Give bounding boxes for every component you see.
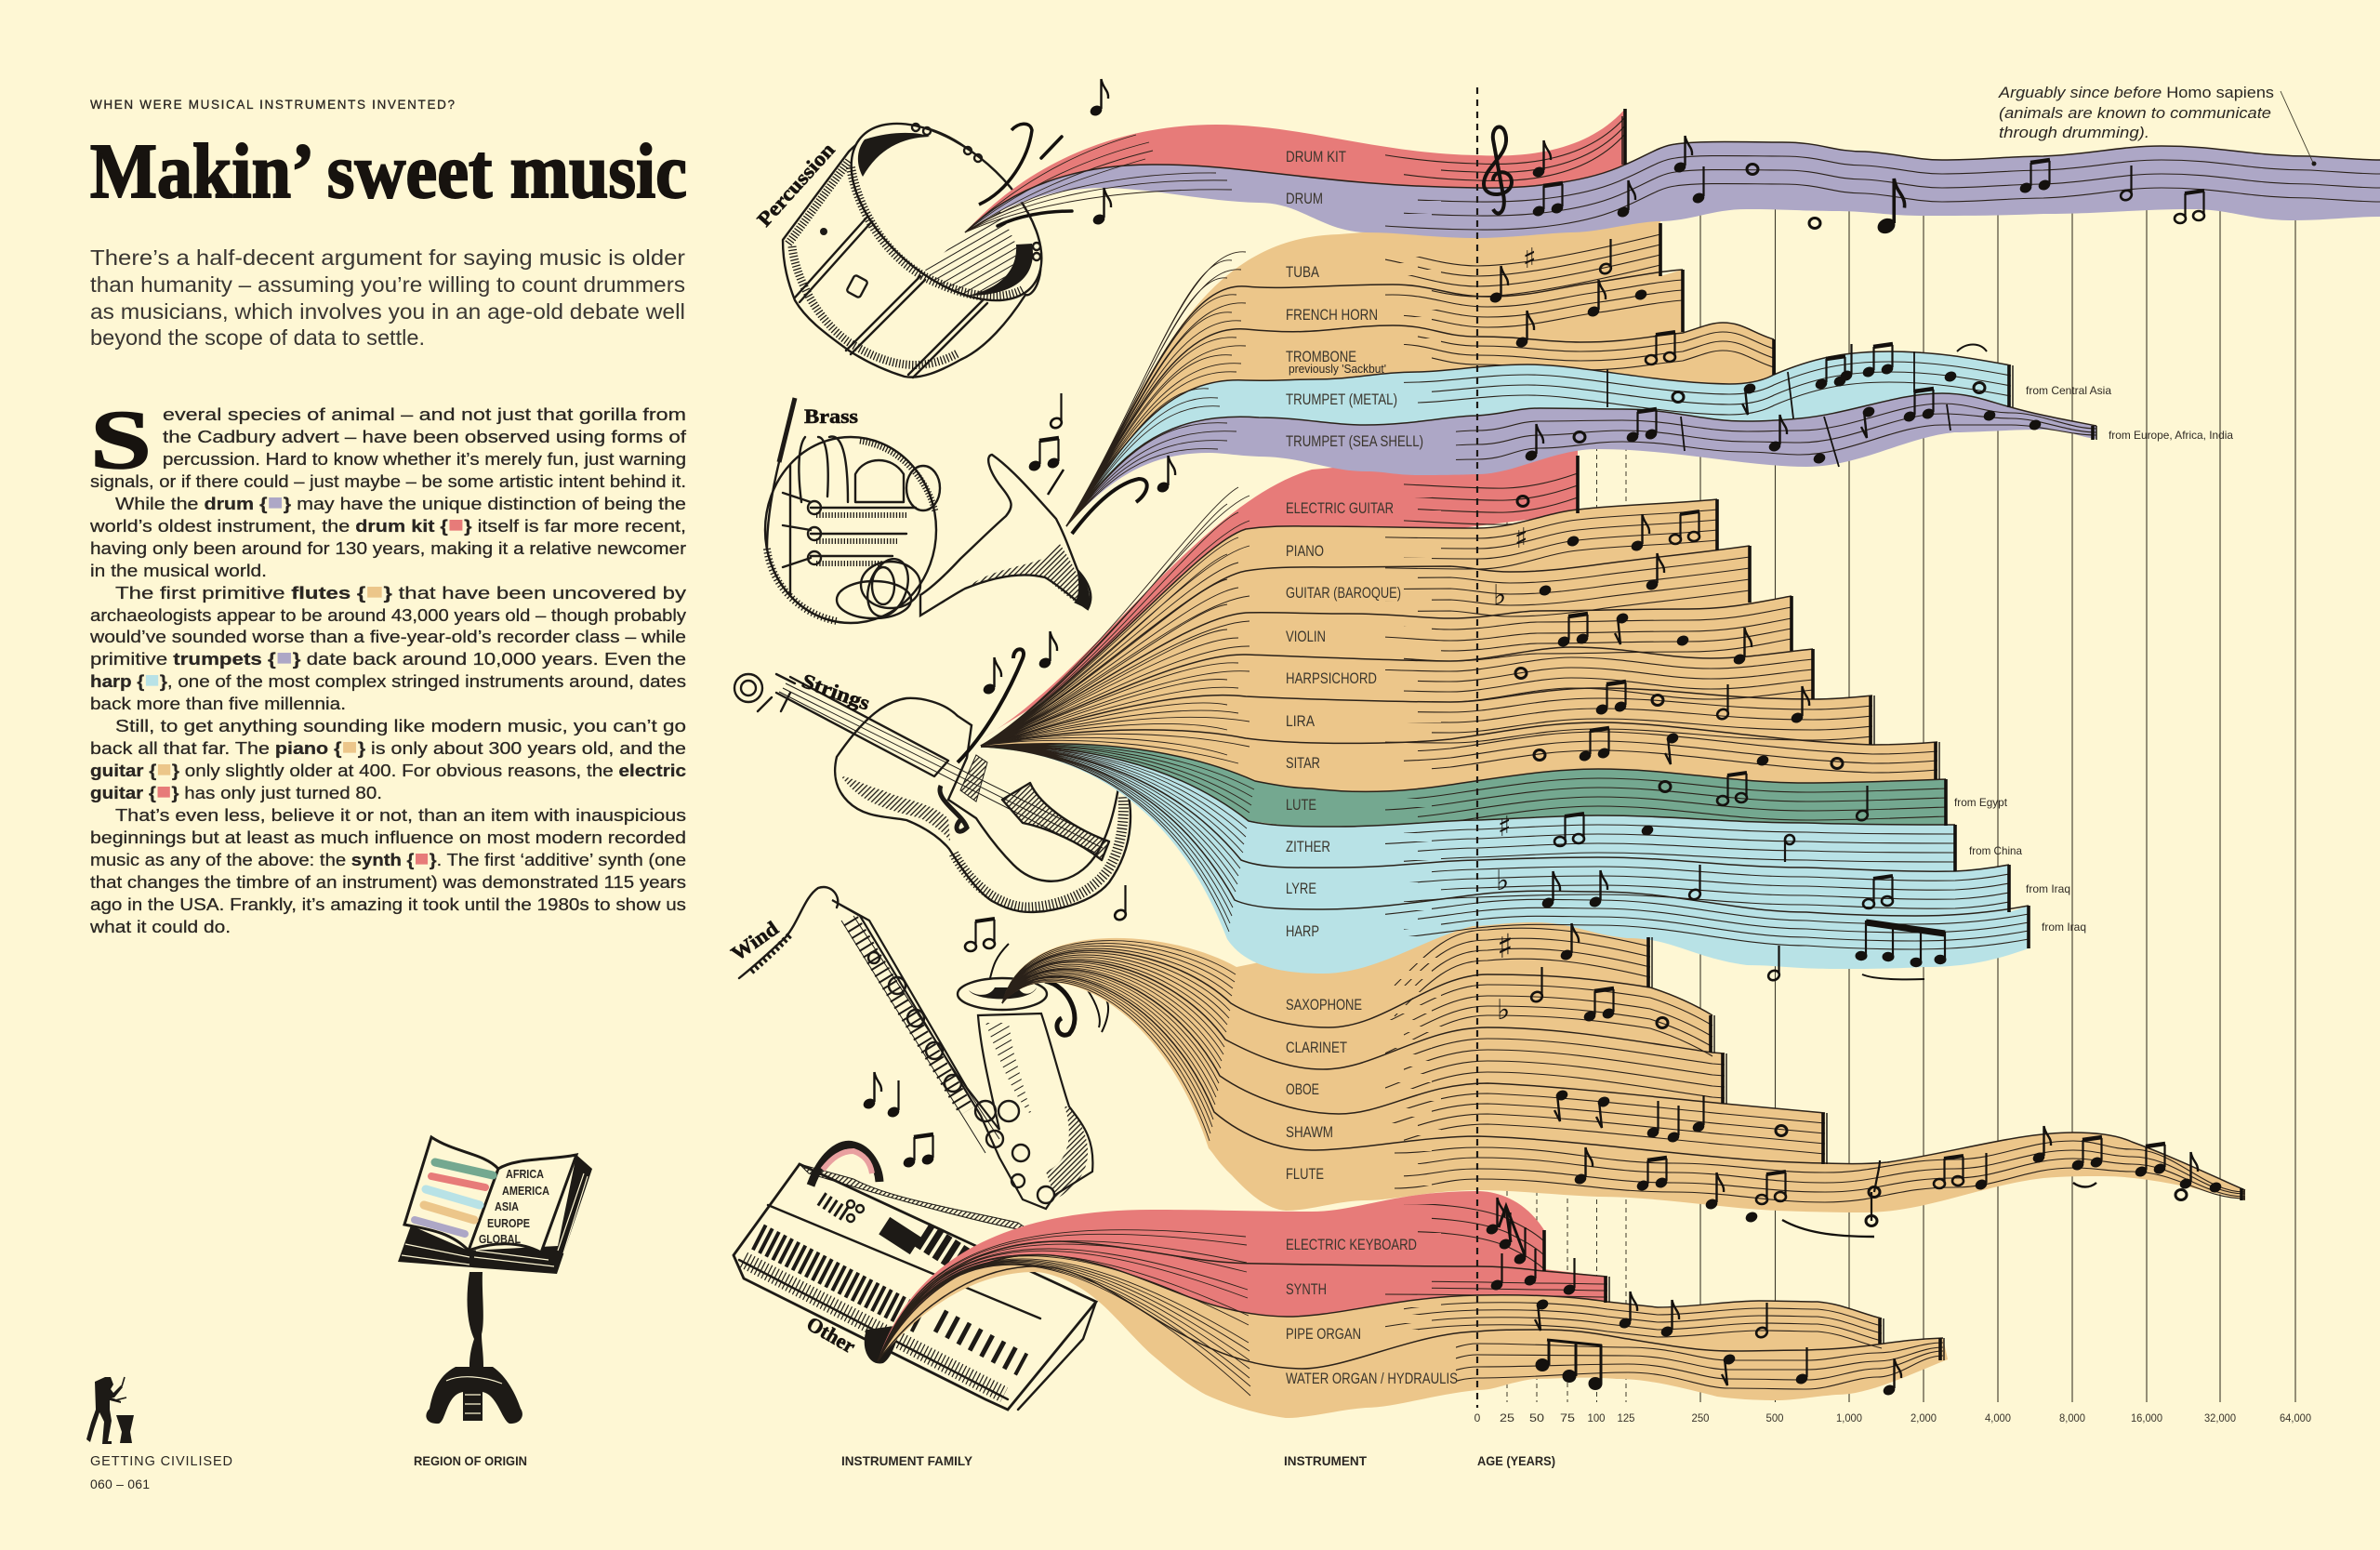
body text: having only been around for 130 years, making it a relative newcomer bbox=[90, 539, 686, 558]
family label: percussion: Percussion bbox=[752, 138, 840, 231]
music notes: brass bbox=[1027, 239, 2043, 494]
body text: ago in the USA. Frankly, it’s amazing it took until the 1980s to show us bbox=[90, 895, 686, 914]
label: violin: VIOLIN bbox=[1286, 629, 1326, 645]
illustration: electric keyboard bbox=[734, 1145, 1096, 1410]
section footer bbox=[90, 1454, 232, 1491]
origin notes: from Iraq bbox=[2042, 921, 2086, 934]
music notes: strings: ♭ bbox=[1493, 579, 1506, 612]
music notes: strings: ♯ bbox=[1498, 811, 1512, 843]
label: flute: FLUTE bbox=[1286, 1166, 1324, 1183]
stream: piano, baroque guitar, violin, harpsichord, lira, sitar bbox=[981, 499, 1937, 801]
body text bbox=[89, 405, 687, 936]
age axis tick labels: 8,000 bbox=[2059, 1411, 2085, 1424]
age axis tick labels: 500 bbox=[1766, 1411, 1784, 1424]
label: trombone: TROMBONE bbox=[1286, 349, 1356, 365]
stream: electric guitar bbox=[981, 446, 1578, 739]
stream: drum kit bbox=[965, 109, 1625, 258]
age axis tick labels: 1,000 bbox=[1836, 1411, 1862, 1424]
stream: pipe organ and water organ bbox=[878, 1255, 1948, 1418]
stream: trumpet (sea shell) bbox=[1079, 394, 2096, 513]
brass fan lines bbox=[1066, 252, 1246, 526]
column heading: age: AGE (YEARS) bbox=[1477, 1453, 1555, 1468]
body text: world’s oldest instrument, the drum kit { ■} itself is far more recent, bbox=[89, 512, 686, 537]
end barlines bbox=[1544, 109, 2241, 1360]
music notes: wind: ♯ bbox=[1497, 928, 1513, 966]
label: previously sackbut: previously 'Sackbut' bbox=[1289, 363, 1386, 376]
body text: guitar { ■} has only just turned 80. bbox=[90, 779, 382, 804]
label: clarinet: CLARINET bbox=[1286, 1040, 1347, 1056]
thin end barlines bbox=[1609, 116, 2244, 1360]
origin notes: from Europe, Africa, India bbox=[2109, 429, 2233, 442]
body text: archaeologists appear to be around 43,000 years old – though probably bbox=[90, 606, 686, 625]
age axis tick labels: 100 bbox=[1588, 1411, 1606, 1424]
origin notes: from Central Asia bbox=[2026, 384, 2111, 397]
label: drum: DRUM bbox=[1286, 191, 1323, 207]
label: sitar: SITAR bbox=[1286, 755, 1320, 772]
origin notes: from Egypt bbox=[1954, 796, 2008, 809]
age axis tick labels: 16,000 bbox=[2131, 1411, 2162, 1424]
body text: signals, or if there could – just maybe – be some artistic intent behind it. bbox=[90, 472, 686, 491]
section footer: GETTING CIVILISED bbox=[90, 1454, 232, 1469]
music notes: wind: ♭ bbox=[1497, 994, 1510, 1027]
body text: back more than five millennia. bbox=[90, 695, 346, 713]
label: harpsichord: HARPSICHORD bbox=[1286, 670, 1377, 687]
intro paragraph: There’s a half-decent argument for saying music is older bbox=[90, 245, 685, 270]
age axis tick labels: 25 bbox=[1500, 1411, 1514, 1424]
label: piano: PIANO bbox=[1286, 543, 1324, 560]
label: pipe organ: PIPE ORGAN bbox=[1286, 1326, 1361, 1343]
stream: saxophone, clarinet, oboe, shawm, flute bbox=[1002, 916, 2245, 1212]
zero line bbox=[1476, 87, 1478, 1408]
column heading: region of origin: REGION OF ORIGIN bbox=[414, 1453, 527, 1468]
label: drum kit: DRUM KIT bbox=[1286, 149, 1346, 166]
illustration: music stand with book: AFRICA bbox=[506, 1168, 544, 1181]
body text: The first primitive flutes { ■ } that have been uncovered by bbox=[115, 579, 686, 604]
age axis tick labels: 32,000 bbox=[2204, 1411, 2236, 1424]
intro paragraph bbox=[90, 245, 685, 350]
family label: strings: Strings bbox=[799, 669, 874, 715]
stream: trumpet (metal) bbox=[1093, 351, 2012, 489]
illustration: saxophone bbox=[739, 887, 1108, 1209]
annotation: homo sapiens: (animals are known to communicate bbox=[1999, 104, 2271, 122]
age axis tick labels: 2,000 bbox=[1911, 1411, 1937, 1424]
music notes: brass: ♯ bbox=[1523, 243, 1537, 275]
intro paragraph: beyond the scope of data to settle. bbox=[90, 325, 425, 350]
intro paragraph: as musicians, which involves you in an age-old debate well bbox=[90, 299, 685, 324]
drop cap: S bbox=[90, 394, 152, 486]
other instruments fan lines bbox=[878, 1230, 1250, 1396]
strings lower fan lines bbox=[981, 745, 1254, 932]
body text: music as any of the above: the synth { ■}. The first ‘additive’ synth (one bbox=[90, 846, 686, 871]
family boundary lines bbox=[878, 141, 2380, 1369]
illustration: music stand with book: EUROPE bbox=[487, 1217, 530, 1230]
intro paragraph: than humanity – assuming you’re willing to count drummers bbox=[90, 272, 685, 297]
label: lute: LUTE bbox=[1286, 797, 1316, 814]
stream: electric keyboard and synth bbox=[878, 1191, 1607, 1361]
origin notes: from China bbox=[1969, 844, 2022, 857]
age axis tick labels: 75 bbox=[1560, 1411, 1575, 1424]
body text: While the drum { ■} may have the unique distinction of being the bbox=[115, 490, 686, 515]
section footer: 060 – 061 bbox=[90, 1477, 150, 1491]
illustration: music stand with book: ASIA bbox=[495, 1200, 519, 1213]
label: electric keyboard: ELECTRIC KEYBOARD bbox=[1286, 1237, 1417, 1253]
kicker: WHEN WERE MUSICAL INSTRUMENTS INVENTED? bbox=[90, 98, 455, 112]
age axis tick labels: 250 bbox=[1692, 1411, 1710, 1424]
family label: brass: Brass bbox=[804, 404, 858, 428]
body text: That’s even less, believe it or not, than an item with inauspicious bbox=[115, 806, 686, 825]
stream: lute bbox=[981, 744, 1946, 832]
leader line from annotation to drum bbox=[2281, 91, 2317, 166]
label: trumpet sea shell: TRUMPET (SEA SHELL) bbox=[1286, 433, 1423, 450]
annotation: homo sapiens: through drumming). bbox=[1999, 124, 2149, 141]
age axis grid lines bbox=[1507, 186, 2295, 1402]
stream: drum bbox=[965, 141, 2380, 274]
label: saxophone: SAXOPHONE bbox=[1286, 997, 1362, 1013]
label: oboe: OBOE bbox=[1286, 1081, 1319, 1098]
age axis tick labels: 125 bbox=[1618, 1411, 1635, 1424]
stream: zither, lyre, harp bbox=[981, 747, 2029, 974]
title: Makin’ sweet music bbox=[90, 128, 687, 215]
label: water organ: WATER ORGAN / HYDRAULIS bbox=[1286, 1371, 1458, 1387]
label: zither: ZITHER bbox=[1286, 839, 1330, 855]
label: trumpet metal: TRUMPET (METAL) bbox=[1286, 391, 1397, 408]
music notes: strings: ♭ bbox=[1496, 865, 1509, 897]
annotation: homo sapiens: Arguably since before Homo sapiens bbox=[1998, 84, 2274, 101]
label: french horn: FRENCH HORN bbox=[1286, 307, 1378, 324]
body text: would’ve sounded worse than a five-year-old’s recorder class – while bbox=[89, 628, 686, 646]
illustration: music stand with book: GLOBAL bbox=[479, 1233, 521, 1246]
body text: harp { ■}, one of the most complex stringed instruments around, dates bbox=[90, 668, 686, 693]
music notes: percussion bbox=[1089, 79, 2204, 236]
label: tuba: TUBA bbox=[1286, 264, 1319, 281]
body text: what it could do. bbox=[89, 918, 231, 936]
family label: wind: Wind bbox=[727, 916, 783, 965]
icon: drummer silhouette bbox=[86, 1377, 134, 1444]
label: electric guitar: ELECTRIC GUITAR bbox=[1286, 500, 1394, 517]
age axis tick labels: 50 bbox=[1529, 1411, 1544, 1424]
music notes: strings: ♯ bbox=[1514, 523, 1528, 555]
strings upper fan lines bbox=[981, 487, 1250, 763]
illustration: french horn bbox=[765, 398, 1147, 623]
music notes: wind bbox=[965, 885, 2223, 1237]
column heading: instrument family: INSTRUMENT FAMILY bbox=[841, 1453, 973, 1468]
family label: other: Other bbox=[803, 1312, 860, 1358]
body text: Still, to get anything sounding like modern music, you can’t go bbox=[115, 717, 686, 735]
percussion fan lines bbox=[965, 135, 1232, 232]
label: guitar baroque: GUITAR (BAROQUE) bbox=[1286, 585, 1401, 602]
illustration: drum bbox=[783, 90, 1074, 378]
illustration: music stand with book: AMERICA bbox=[502, 1185, 549, 1198]
body text: guitar { ■} only slightly older at 400. For obvious reasons, the electric bbox=[90, 757, 686, 782]
body text: primitive trumpets { ■} date back around 10,000 years. Even the bbox=[90, 645, 686, 670]
label: lira: LIRA bbox=[1286, 713, 1315, 730]
age axis tick labels: 4,000 bbox=[1985, 1411, 2011, 1424]
column heading: instrument: INSTRUMENT bbox=[1284, 1453, 1367, 1468]
body text: everal species of animal – and not just that gorilla from bbox=[163, 405, 686, 424]
age axis tick labels: 64,000 bbox=[2280, 1411, 2311, 1424]
label: lyre: LYRE bbox=[1286, 881, 1316, 897]
body text: percussion. Hard to know whether it’s merely fun, just warning bbox=[163, 450, 686, 469]
music notes: other instruments bbox=[862, 1072, 1901, 1397]
music notes: strings bbox=[982, 497, 1947, 982]
label: harp: HARP bbox=[1286, 923, 1319, 940]
instrument labels bbox=[1286, 149, 1458, 1387]
body text: beginnings but at least as much influence on most modern recorded bbox=[90, 828, 686, 847]
body text: in the musical world. bbox=[90, 562, 267, 580]
illustration: music stand with book bbox=[398, 1137, 592, 1424]
age axis tick labels bbox=[1474, 1411, 2311, 1424]
age axis tick labels: 0 bbox=[1474, 1411, 1481, 1424]
origin notes: from Iraq bbox=[2026, 882, 2070, 895]
wind fan lines bbox=[1002, 941, 1236, 1141]
origin notes bbox=[1954, 384, 2233, 934]
stream: tuba, french horn, trombone bbox=[1078, 221, 1772, 515]
family labels bbox=[727, 138, 874, 1358]
illustration: violin bbox=[734, 649, 1130, 912]
annotation: homo sapiens bbox=[1998, 84, 2274, 141]
body text: the Cadbury advert – have been observed using forms of bbox=[163, 428, 687, 446]
label: synth: SYNTH bbox=[1286, 1281, 1327, 1298]
body text: that changes the timbre of an instrument) was demonstrated 115 years bbox=[90, 873, 686, 892]
body text: back all that far. The piano { ■} is only about 300 years old, and the bbox=[90, 735, 686, 760]
label: shawm: SHAWM bbox=[1286, 1124, 1333, 1141]
